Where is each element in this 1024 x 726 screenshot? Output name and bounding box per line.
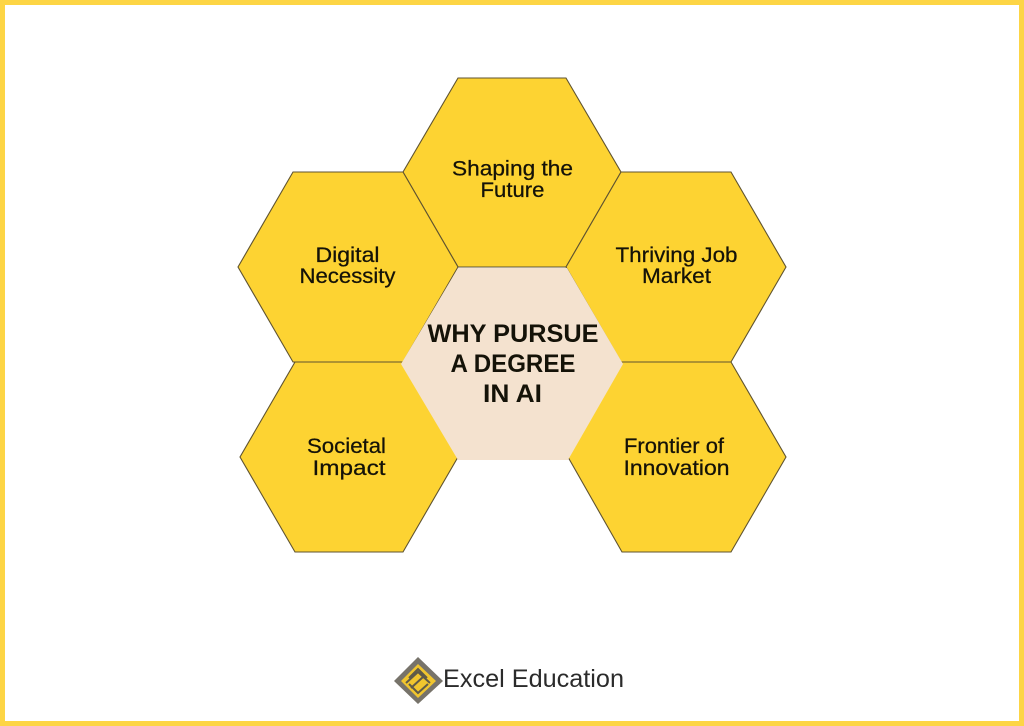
hexagon: Societal Impact: Societal: [307, 435, 386, 458]
center hexagon: Why Pursue a Degree in AI: A DEGREE: [450, 350, 576, 378]
hexagon: Thriving Job Market: Thriving Job: [616, 244, 738, 267]
wordmark: Excel Education: [443, 665, 624, 693]
hexagon: Frontier of Innovation: Innovation: [624, 457, 730, 480]
hexagon: Thriving Job Market: [566, 172, 786, 362]
hexagon: Digital Necessity: [238, 172, 458, 362]
hexagon: Shaping the Future: Shaping the: [452, 158, 573, 180]
center hexagon: Why Pursue a Degree in AI: [401, 268, 623, 460]
hexagon: Societal Impact: [240, 362, 458, 552]
center hexagon: Why Pursue a Degree in AI: IN AI: [483, 380, 542, 408]
hexagon: Thriving Job Market: Market: [642, 265, 711, 288]
center hexagon: Why Pursue a Degree in AI: WHY PURSUE: [428, 320, 598, 348]
logo: Excel Education: [394, 657, 624, 704]
hexagon: Digital Necessity: Digital: [316, 244, 380, 267]
hexagon: Frontier of Innovation: Frontier of: [624, 435, 724, 458]
hexagon: Digital Necessity: Necessity: [300, 265, 396, 288]
hexagon: Frontier of Innovation: [568, 362, 786, 552]
hexagon: Societal Impact: Impact: [312, 457, 386, 480]
icon: diamond logo mark: [394, 657, 443, 704]
hexagon: Shaping the Future: Future: [480, 179, 544, 202]
hexagon: Shaping the Future: [403, 78, 621, 267]
